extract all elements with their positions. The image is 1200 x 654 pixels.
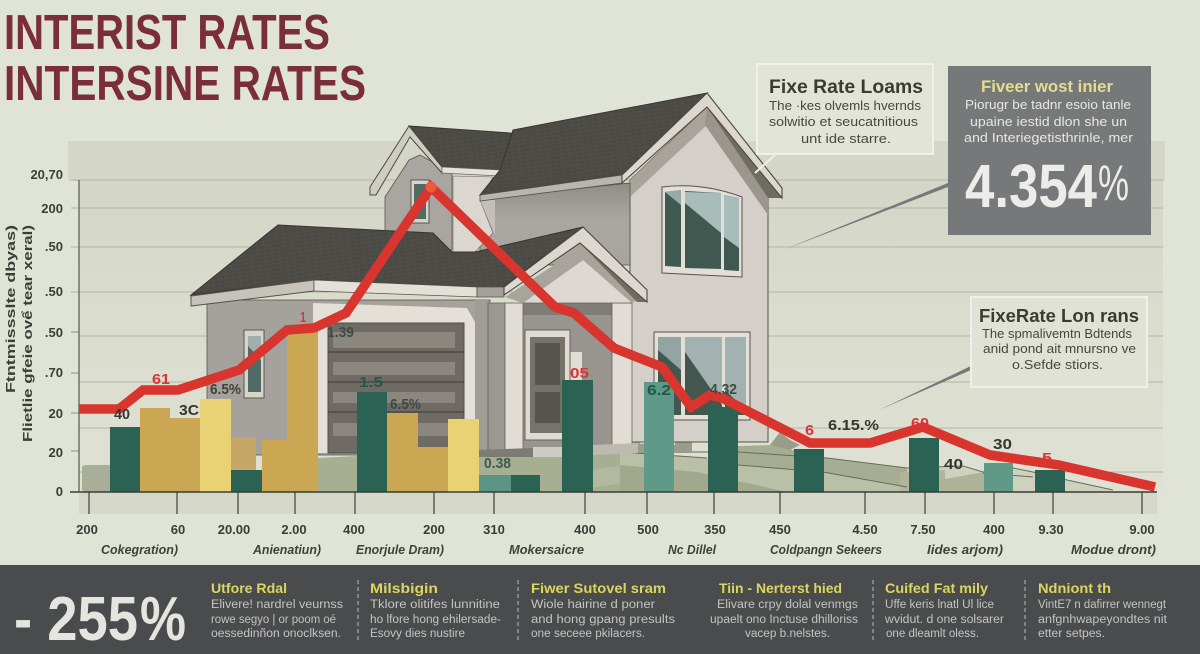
house: dormer wall <box>385 155 452 250</box>
chart value labels: 1 <box>300 309 306 326</box>
bottom panel <box>0 565 1200 654</box>
house: second floor wall <box>480 183 630 265</box>
chart value labels: 5 <box>1042 450 1052 467</box>
y axis title: Ftntmissslte dbyas) <box>3 225 18 393</box>
x axis tick labels: 310 <box>483 522 505 537</box>
house: porch steps <box>478 443 638 457</box>
chart value labels: 1.39 <box>327 324 354 341</box>
house: upper right wall <box>630 107 768 442</box>
big stat: % <box>140 585 186 654</box>
y axis labels: 0 <box>56 484 63 499</box>
y axis labels: .50 <box>45 325 63 340</box>
house: porch wall <box>523 297 612 450</box>
x axis tick labels: 7.50 <box>910 522 936 537</box>
x axis tick labels: 350 <box>704 522 726 537</box>
column 5 <box>884 580 1004 640</box>
x axis tick labels: 20.00 <box>218 522 250 537</box>
column 4 <box>710 580 858 640</box>
x axis tick labels: 60 <box>171 522 185 537</box>
chart value labels: 30 <box>993 436 1012 453</box>
callout: grey stat box <box>783 66 1151 250</box>
column 1: rowe segyo | or poom oé <box>211 614 336 626</box>
house: front door <box>525 330 582 440</box>
y axis labels: 20,70 <box>30 167 63 182</box>
house: lower window <box>654 332 750 420</box>
column 3 <box>531 580 675 640</box>
y axis labels: 200 <box>41 201 63 216</box>
house: porch columns <box>488 303 632 450</box>
ground and lawn <box>82 430 1113 492</box>
house: dormer gable trim <box>370 126 442 195</box>
column 5: one dleamlt oless. <box>886 628 979 640</box>
callout: grey stat box: upaine iestid dlon she un <box>970 114 1127 129</box>
column 2: Tklore olitifes lunnitine <box>370 599 500 611</box>
column 4: Tiin - Nerterst hied <box>719 580 842 596</box>
column 5: Uffe keris lnatl Ul lice <box>885 599 994 611</box>
x axis category labels: Coldpangn Sekeers <box>770 542 882 557</box>
y axis labels: .50 <box>45 284 63 299</box>
chart value labels: 40 <box>114 406 130 423</box>
x axis tick labels: 9.00 <box>1129 522 1155 537</box>
x axis category labels: Anienatiun) <box>252 542 321 557</box>
x axis tick labels: 2.00 <box>281 522 307 537</box>
x axis tick labels: 500 <box>637 522 659 537</box>
x axis category labels: Cokegration) <box>101 542 178 557</box>
chart value labels: 1.5 <box>359 374 383 391</box>
x axis category labels: Mokersaicre <box>509 542 584 557</box>
house illustration <box>191 93 782 457</box>
column 1: Utfore Rdal <box>211 580 287 596</box>
x axis tick labels: 400 <box>574 522 596 537</box>
column 3: one seceee pkilacers. <box>531 628 645 640</box>
y axis title <box>3 225 35 442</box>
callout: fixed rate loans lower: FixeRate Lon rans <box>979 306 1139 326</box>
x axis category labels <box>101 542 1156 557</box>
column 5: wvidut. d one solsarer <box>884 614 1004 626</box>
x axis category labels: Nc Dillel <box>668 542 716 557</box>
house: dormer window <box>411 180 429 223</box>
column 4: Elivare crpy dolal venmgs <box>717 599 858 611</box>
x axis category labels: Modue dront) <box>1071 542 1156 557</box>
column 3: Wiole hairine d poner <box>531 599 655 611</box>
column 2: ho lfore hong ehilersade- <box>370 614 501 626</box>
peak marker <box>426 182 436 192</box>
chart value labels: 0.38 <box>484 455 511 472</box>
x axis category labels: Enorjule Dram) <box>356 542 444 557</box>
column 6: etter setpes. <box>1038 628 1105 640</box>
chart value labels: 05 <box>570 365 589 382</box>
title: INTERSINE RATES <box>4 57 366 111</box>
callout: fixed rate loans lower: o.Sefde stiors. <box>1012 357 1103 372</box>
chart value labels: 4.32 <box>710 381 737 398</box>
chart value labels: 3C <box>179 402 199 419</box>
x axis tick labels: 450 <box>769 522 791 537</box>
x axis tick labels: 400 <box>983 522 1005 537</box>
chart value labels: 40 <box>944 456 963 473</box>
y axis labels: .70 <box>45 365 63 380</box>
callout: fixed rate loans top: unt ide starre. <box>801 131 891 146</box>
x axis category labels: Iides arjom) <box>927 542 1003 557</box>
x axis baseline <box>70 491 1157 493</box>
x axis tick labels <box>76 522 1155 537</box>
chart value labels: 6.5% <box>210 381 241 398</box>
column 1: oessedinñon onoclksen. <box>211 628 341 640</box>
column 3: Fiwer Sutovel sram <box>531 580 666 596</box>
y axis labels: .50 <box>45 239 63 254</box>
column 5: Cuifed Fat mily <box>885 580 988 596</box>
callout: grey stat box: Piorugr be tadnr esoio tanle <box>965 97 1131 112</box>
callout: grey stat box: 4.354 <box>965 152 1097 220</box>
callout: fixed rate loans top: The ·kes olvemls hvernds <box>769 98 921 113</box>
y axis line <box>78 180 80 492</box>
chart value labels: 60 <box>911 415 929 432</box>
chart value labels: 6.5% <box>390 396 421 413</box>
house: dormer roof <box>409 126 517 170</box>
tick band <box>79 492 1157 514</box>
callout: grey stat box: Fiveer wost inier <box>981 77 1113 96</box>
y axis labels: 20 <box>49 445 63 460</box>
title: INTERIST RATES <box>4 6 330 60</box>
callout: grey stat box: and Interiegetisthrinle, mer <box>964 130 1134 145</box>
column 6: VintE7 n dafirrer wennegt <box>1038 599 1167 611</box>
x axis tick labels: 200 <box>423 522 445 537</box>
house: small garage window <box>244 330 264 398</box>
column 2 <box>370 580 501 640</box>
x axis tick labels: 200 <box>76 522 98 537</box>
title <box>4 6 366 111</box>
chart value labels <box>114 309 1052 473</box>
house: upper window <box>662 186 742 277</box>
column 1: Elivere! nardrel veurnss <box>211 599 343 611</box>
red trend line <box>79 187 1155 487</box>
column 3: and hong gpang presults <box>531 614 675 626</box>
column 4: vacep b.nelstes. <box>745 628 830 640</box>
callout: fixed rate loans lower: The spmalivemtn Bdtends <box>982 326 1132 341</box>
callout: fixed rate loans top <box>755 64 933 173</box>
column 6: Ndniont th <box>1038 580 1111 596</box>
column 4: upaelt ono Inctuse dhilloriss <box>710 614 858 626</box>
y axis labels: 20 <box>49 406 63 421</box>
x axis tick labels: 9.30 <box>1038 522 1064 537</box>
house: porch gable <box>523 260 632 303</box>
house: garage wall <box>207 300 490 455</box>
house: garage door <box>328 323 464 453</box>
callout: grey stat box: % <box>1098 155 1129 211</box>
house: main gable trim <box>707 107 782 198</box>
callout: fixed rate loans top: solwitio et seucatnitious <box>769 114 919 129</box>
house: garage door frame <box>313 303 475 453</box>
chart value labels: 6 <box>805 422 814 439</box>
y axis labels <box>30 167 63 499</box>
bar chart <box>110 331 1065 492</box>
callout: fixed rate loans lower <box>879 297 1147 410</box>
house: white centre section <box>453 176 493 252</box>
callout: fixed rate loans lower: anid pond ait mnursno ve <box>983 341 1136 356</box>
chart value labels: 61 <box>152 371 170 388</box>
house: main roof <box>480 93 707 195</box>
house: lower roof <box>191 225 583 295</box>
column 6: anfgnhwapeyondtes nit <box>1038 614 1168 626</box>
big stat: - 255 <box>14 585 138 654</box>
house: main roof fascia <box>480 175 622 201</box>
y axis title: Flietlie gfeie ovể tear xeral) <box>20 225 35 442</box>
x axis tick labels: 4.50 <box>852 522 878 537</box>
house: roof fascia <box>191 280 314 306</box>
x axis tick labels: 400 <box>343 522 365 537</box>
chart value labels: 6.2 <box>647 382 671 399</box>
column 2: Milsbigin <box>370 580 438 596</box>
column 2: Esovy dies nustire <box>370 628 465 640</box>
callout: fixed rate loans top: Fixe Rate Loams <box>769 77 923 98</box>
column 1 <box>211 580 343 640</box>
column 6 <box>1038 580 1168 640</box>
chart value labels: 6.15.% <box>828 417 879 434</box>
